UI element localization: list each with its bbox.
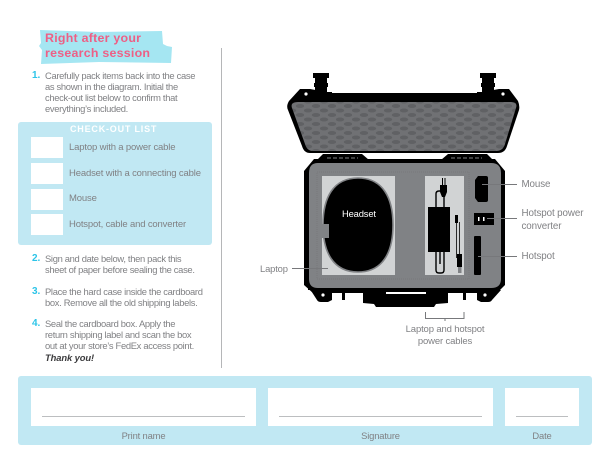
step 4 [32, 318, 194, 363]
hotspot power converter [474, 213, 494, 225]
leader lines [292, 184, 517, 321]
step 1: 1. [32, 70, 40, 81]
step 3: box. Remove all the old shipping labels. [45, 297, 197, 308]
mouse [475, 176, 488, 202]
field: date [505, 388, 579, 440]
label: hotspot power converter: Hotspot power [522, 208, 583, 219]
heading: right after your research session [39, 30, 172, 64]
step 4: Seal the cardboard box. Apply the [45, 318, 175, 329]
case hinges [317, 154, 493, 160]
label: hotspot power converter: converter [522, 221, 561, 232]
step 2: sheet of paper before sealing the case. [45, 264, 195, 275]
hotspot [474, 236, 481, 275]
laptop [322, 176, 395, 275]
checklist rows: Laptop with a power cable [69, 142, 175, 153]
panel: check-out list [18, 122, 212, 245]
label: hotspot: Hotspot [522, 251, 555, 262]
diagram: open hard case [287, 73, 520, 321]
step 1: everything’s included. [45, 103, 128, 114]
label: laptop and hotspot power cables: Laptop and hotspot [406, 324, 484, 335]
case lid [287, 89, 519, 153]
step 3 [32, 286, 203, 308]
step 4: return shipping label and scan the box [45, 329, 191, 340]
label: laptop and hotspot power cables: power cables [418, 336, 472, 346]
step 1: as shown in the diagram. Initial the [45, 81, 178, 92]
step 3: 3. [32, 286, 40, 297]
field: date: Date [532, 430, 552, 440]
field: signature: Signature [361, 430, 400, 440]
check-out heading: CHECK-OUT LIST [70, 124, 157, 134]
heading: right after your research session: Right after your [45, 31, 141, 45]
step 2: Sign and date below, then pack this [45, 253, 181, 264]
case bottom latches [308, 286, 501, 307]
step 4: 4. [32, 318, 40, 329]
icon: lid latches [310, 73, 499, 98]
case body [304, 159, 505, 293]
checklist rows [31, 137, 201, 235]
label: laptop: Laptop [260, 263, 288, 274]
step 1: check-out list below to confirm that [45, 92, 177, 103]
step 1 [32, 70, 195, 114]
label: headset: Headset [342, 208, 376, 219]
step 4: out at your store’s FedEx access point. [45, 340, 194, 351]
checklist rows: Headset with a connecting cable [69, 168, 201, 179]
power cables compartment [425, 176, 464, 275]
label: hotspot power converter [522, 208, 584, 232]
step 2 [32, 253, 195, 275]
panel: sign-off form [18, 376, 592, 445]
heading: right after your research session: research session [45, 46, 150, 60]
checklist rows: Hotspot, cable and converter [69, 219, 186, 230]
checklist rows: Mouse [69, 193, 97, 204]
field: print name [31, 388, 256, 440]
headset [322, 178, 393, 272]
step 1: Carefully pack items back into the case [45, 70, 195, 81]
step 2: 2. [32, 253, 40, 264]
label: mouse: Mouse [522, 179, 550, 190]
field: print name: Print name [122, 430, 165, 440]
step 4: Thank you! [45, 352, 94, 363]
field: signature [268, 388, 493, 441]
step 3: Place the hard case inside the cardboard [45, 286, 203, 297]
label: laptop and hotspot power cables [406, 324, 484, 346]
